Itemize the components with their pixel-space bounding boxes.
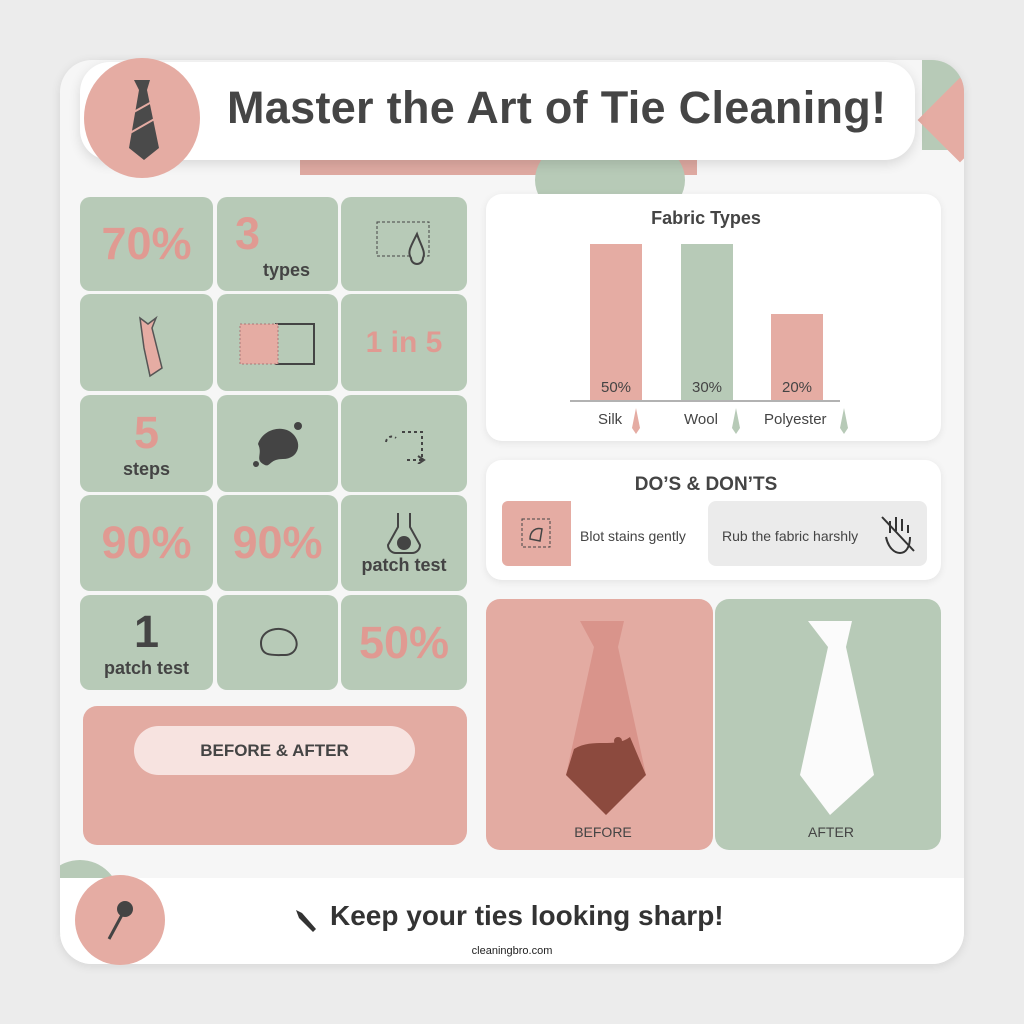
icon: tie circle — [84, 58, 200, 178]
panel: before & after banner — [83, 706, 467, 845]
chart panel: fabric types — [486, 194, 941, 441]
stats grid: 70% — [101, 218, 192, 269]
footer: cleaningbro.com — [472, 945, 552, 957]
after card: AFTER — [808, 824, 854, 840]
panel: before & after banner: BEFORE & AFTER — [200, 741, 349, 760]
chart panel: fabric types: Fabric Types — [651, 208, 761, 228]
footer — [60, 878, 964, 964]
stats grid — [80, 197, 467, 690]
chart panel: fabric types: 50% — [601, 379, 631, 396]
stats grid: types — [263, 260, 310, 280]
stats grid: patch test — [104, 658, 189, 678]
panel: dos and donts: DO’S & DON’TS — [635, 474, 777, 495]
stats grid: 1 — [134, 606, 159, 657]
chart panel: fabric types: 20% — [782, 379, 812, 396]
stats grid: 1 in 5 — [366, 326, 442, 358]
before card — [486, 599, 713, 850]
stats grid: steps — [123, 459, 170, 479]
stats grid: 90% — [101, 517, 192, 568]
header — [80, 62, 915, 160]
stats grid: 3 — [235, 208, 260, 258]
chart panel: fabric types: Wool — [684, 411, 718, 428]
stats grid: 50% — [359, 616, 449, 668]
stats grid: 5 — [134, 407, 159, 458]
decorative bar under header — [300, 150, 697, 175]
stats grid: patch test — [361, 554, 447, 574]
icon: footer circle pin — [75, 875, 165, 965]
panel: dos and donts: Blot stains gently — [580, 528, 686, 544]
chart panel: fabric types: 30% — [692, 379, 722, 396]
before card: BEFORE — [574, 824, 632, 840]
title: Master the Art of Tie Cleaning! — [227, 82, 886, 133]
stats grid: 90% — [232, 517, 323, 568]
icon: small tie — [296, 910, 316, 932]
chart panel: fabric types: Polyester — [764, 411, 827, 428]
panel: dos and donts — [486, 460, 941, 580]
panel: dos and donts: Rub the fabric harshly — [722, 528, 858, 544]
after card — [715, 599, 941, 850]
background card — [60, 60, 964, 964]
chart panel: fabric types: Silk — [598, 411, 623, 428]
footer: Keep your ties looking sharp! — [330, 900, 724, 931]
